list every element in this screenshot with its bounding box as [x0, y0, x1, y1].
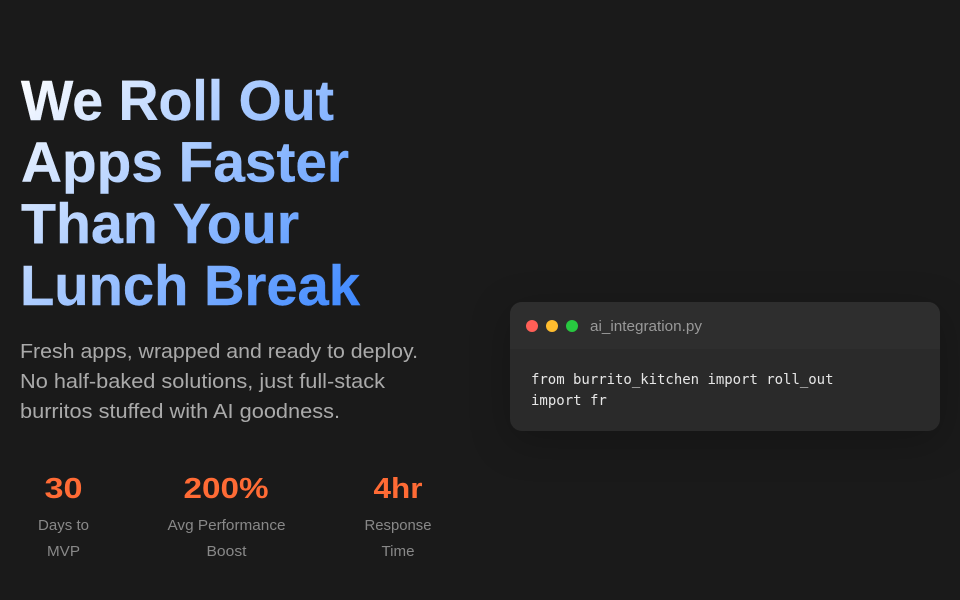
stat: 4hr response time: 4hr — [374, 473, 422, 505]
stat: 200% avg performance boost: 200% — [184, 473, 268, 505]
subtitle text block: No half-baked solutions, just full-stack — [20, 370, 386, 393]
title: Than Your — [21, 192, 299, 256]
title — [20, 69, 360, 318]
title: Apps Faster — [21, 131, 349, 195]
code lines — [531, 372, 834, 409]
subtitle text block: Fresh apps, wrapped and ready to deploy. — [20, 340, 418, 363]
stat: 30 days to MVP: MVP — [47, 544, 80, 560]
file name: ai_integration.py — [590, 319, 703, 335]
code lines: import fr — [531, 393, 607, 409]
subtitle text block: burritos stuffed with AI goodness. — [20, 400, 340, 423]
stat: 200% avg performance boost: Avg Performance — [168, 518, 286, 534]
icon: window control dots — [526, 320, 578, 332]
stat: 30 days to MVP — [38, 473, 89, 560]
stat: 200% avg performance boost: Boost — [206, 544, 246, 560]
stat: 30 days to MVP: Days to — [38, 518, 89, 534]
window title bar — [510, 302, 940, 349]
stat: 4hr response time: Response — [364, 518, 432, 534]
window body — [510, 302, 940, 431]
stat: 4hr response time: Time — [382, 544, 414, 560]
title: Lunch Break — [20, 254, 360, 318]
title: We Roll Out — [21, 69, 334, 133]
subtitle text block — [20, 340, 418, 423]
stat: 200% avg performance boost — [168, 473, 286, 560]
code lines: from burrito_kitchen import roll_out — [531, 372, 834, 388]
stat: 4hr response time — [364, 473, 432, 560]
stat: 30 days to MVP: 30 — [44, 473, 82, 505]
panel: code window — [510, 302, 940, 431]
